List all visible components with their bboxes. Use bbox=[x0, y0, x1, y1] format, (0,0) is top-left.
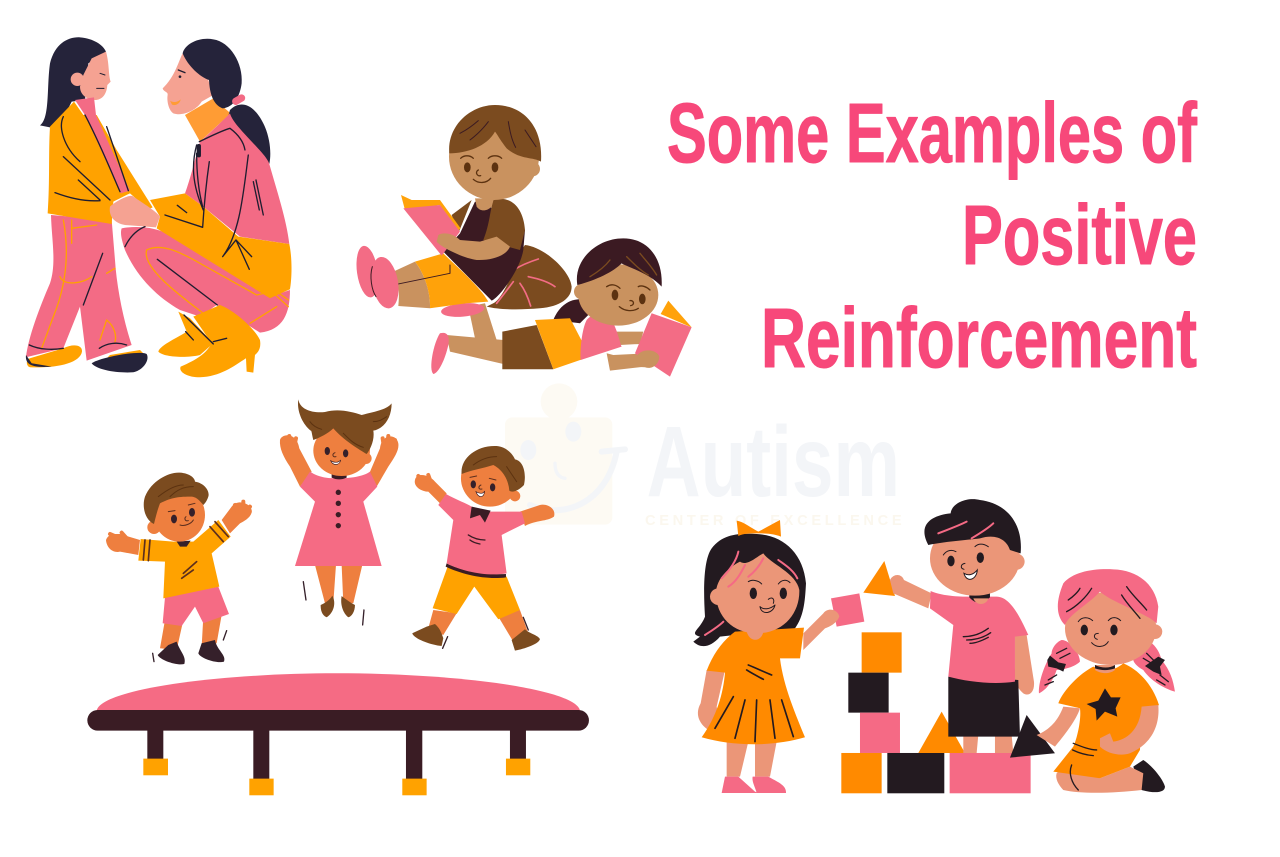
mother bbox=[110, 39, 292, 377]
illustration: mother kneeling with daughter bbox=[26, 37, 292, 377]
illustration: two children reading books bbox=[353, 105, 692, 377]
building blocks bbox=[831, 561, 1031, 793]
watermark: Autism Center of Excellence bbox=[505, 383, 902, 529]
watermark tagline: CENTER OF EXCELLENCE bbox=[645, 513, 902, 529]
boy in orange shirt bbox=[106, 473, 252, 664]
girl in orange dress bbox=[693, 520, 839, 793]
illustration: children jumping on trampoline bbox=[87, 399, 589, 795]
watermark puzzle icon bbox=[505, 383, 625, 525]
trampoline bbox=[87, 673, 589, 795]
daughter bbox=[26, 37, 153, 372]
title: Positive bbox=[962, 188, 1197, 282]
title bbox=[667, 86, 1198, 385]
girl in pink dress bbox=[280, 399, 398, 625]
watermark wordmark: Autism bbox=[647, 406, 900, 518]
lying girl with book bbox=[431, 238, 692, 377]
girl with pink hair bbox=[1010, 569, 1175, 793]
boy in pink shirt bbox=[412, 446, 554, 651]
illustration: children building with blocks bbox=[693, 499, 1175, 793]
seated boy with book bbox=[353, 105, 572, 340]
boy in pink shirt bbox=[890, 499, 1034, 753]
